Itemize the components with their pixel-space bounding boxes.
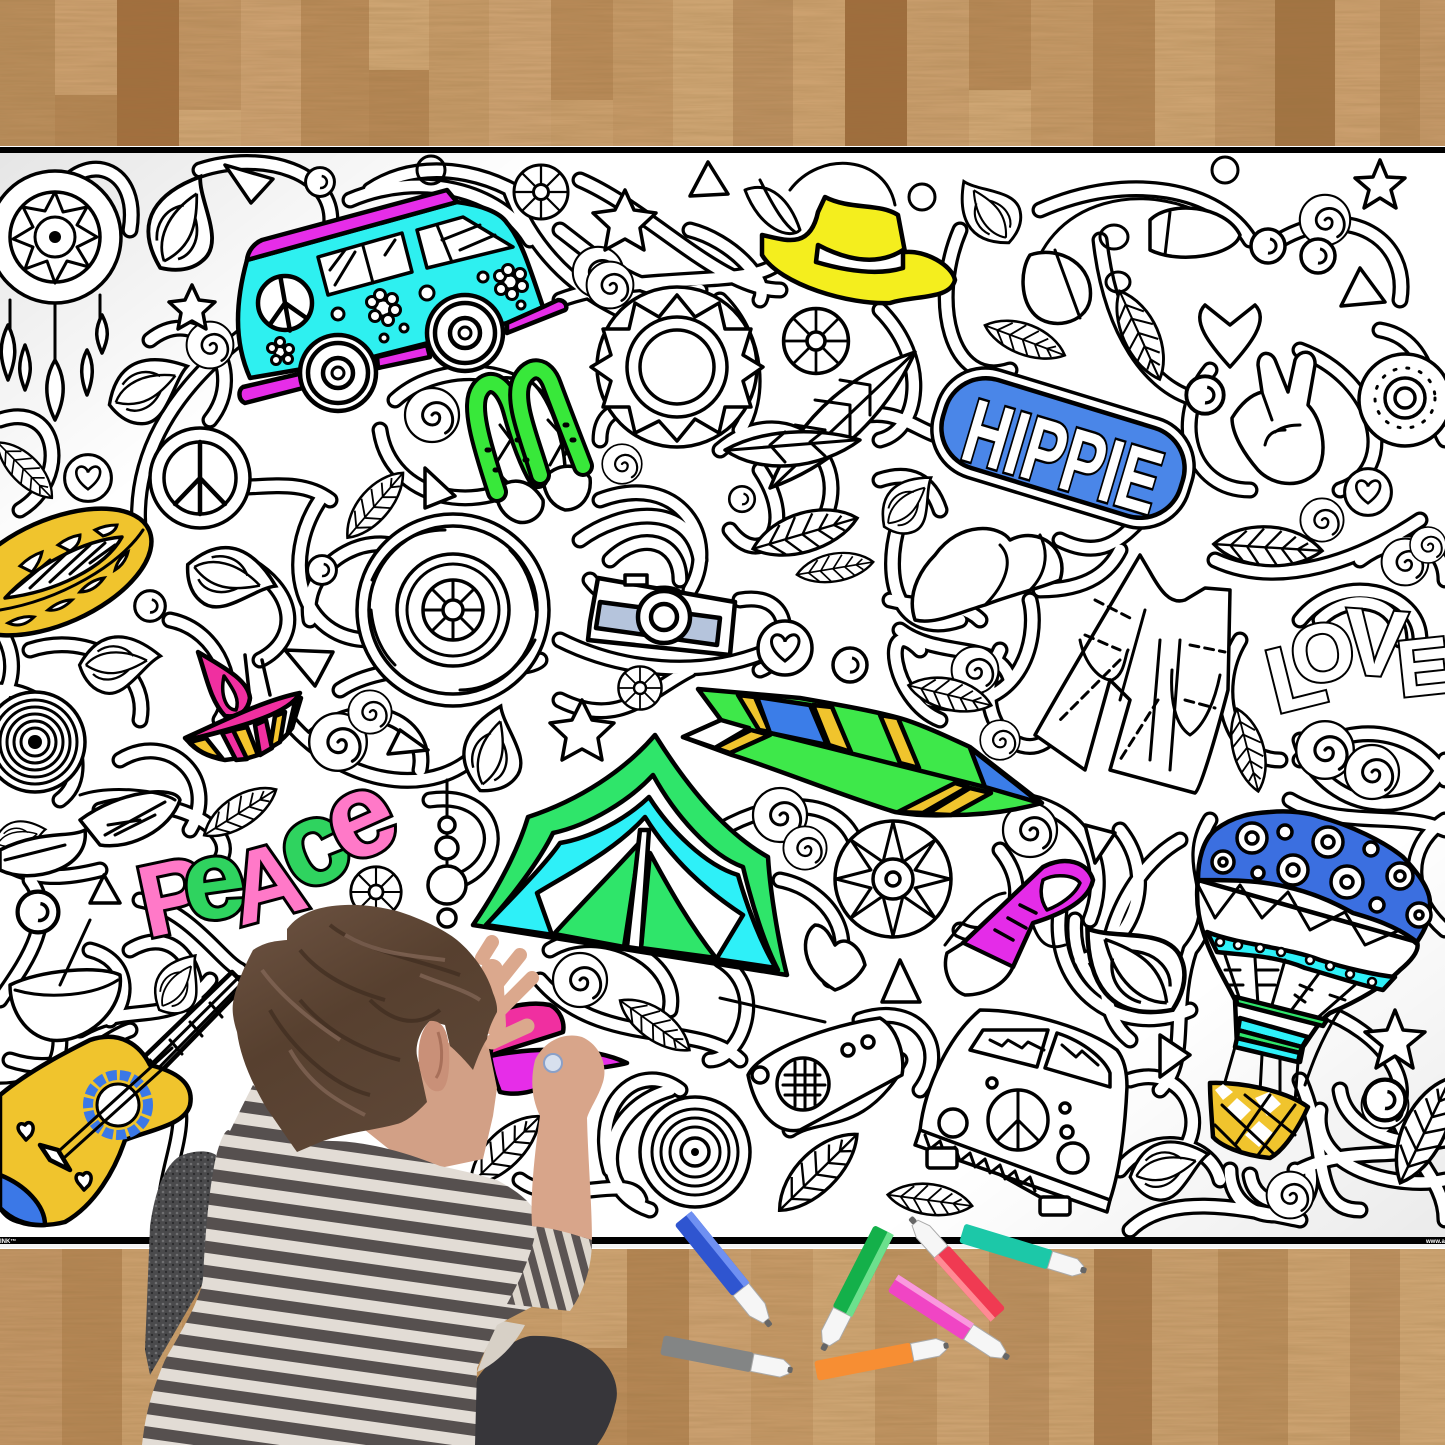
line-art ribbons — [0, 162, 1445, 1230]
star centre — [550, 700, 614, 760]
neck and face — [365, 1030, 497, 1168]
letter c: c — [255, 770, 369, 918]
torso shirt — [142, 1085, 545, 1445]
pink hat behind boy — [490, 1004, 627, 1094]
pink sneaker — [945, 861, 1093, 995]
tent — [473, 735, 787, 975]
letter V: V — [1341, 588, 1411, 697]
marker: blue — [674, 1211, 779, 1333]
marker: magenta — [888, 1275, 1014, 1367]
raised hand fingers — [482, 942, 532, 1042]
letter L: L — [1256, 621, 1335, 733]
radio — [720, 998, 903, 1131]
yellow hat — [745, 163, 955, 303]
marker: orange — [814, 1335, 950, 1381]
sun mandala — [591, 287, 763, 447]
colored van top left — [238, 190, 566, 411]
star wheel — [835, 821, 951, 937]
boy — [142, 905, 617, 1445]
star lower right — [1365, 1010, 1425, 1068]
ear — [418, 1021, 449, 1091]
chain beads — [428, 780, 466, 927]
headphones — [1023, 199, 1240, 323]
right shoe strap — [519, 369, 583, 475]
star left — [169, 285, 215, 329]
letter e: e — [174, 813, 253, 946]
white van bottom — [915, 1010, 1127, 1215]
green shoes — [476, 369, 590, 523]
loose circles — [417, 156, 1238, 292]
marker in hand — [544, 1054, 562, 1072]
feather — [725, 352, 915, 488]
footer brand text: INK™ — [0, 1238, 16, 1245]
letter P: P — [128, 834, 218, 960]
triangles — [90, 162, 1385, 1077]
star top right — [1355, 160, 1405, 208]
peace sign — [150, 428, 250, 528]
letter A: A — [216, 818, 317, 947]
white tummy — [477, 1320, 525, 1372]
cup — [10, 920, 120, 1040]
vinyl record — [357, 514, 549, 706]
camera — [588, 575, 735, 655]
poster sheet — [0, 146, 1445, 1249]
flower mandala right — [1359, 354, 1445, 446]
letter e2: e — [302, 742, 416, 890]
love lettering — [1256, 588, 1445, 733]
vinyl disc bottom — [640, 1097, 750, 1207]
lamp — [185, 652, 301, 760]
marker: green — [813, 1225, 894, 1355]
dreamcatcher — [0, 171, 121, 420]
heart — [805, 925, 865, 990]
letter O: O — [1283, 603, 1362, 704]
peace lettering — [128, 742, 416, 960]
left shoe strap — [476, 383, 538, 492]
shirt sleeve — [507, 1216, 592, 1311]
writing arm — [532, 1036, 604, 1240]
sunglasses — [0, 790, 180, 876]
vinyl disc left — [0, 692, 85, 792]
marker: teal — [959, 1223, 1089, 1281]
marker: gray — [660, 1335, 794, 1380]
guitar — [0, 972, 245, 1225]
footer website text: www.a — [1425, 1239, 1445, 1245]
left knee — [145, 1151, 216, 1375]
star on ribbon top — [593, 190, 656, 250]
jeans leg — [470, 1336, 617, 1445]
denim jacket — [1035, 555, 1230, 793]
hippie badge — [919, 356, 1207, 540]
tambourine — [0, 483, 170, 661]
cloud — [912, 529, 1062, 621]
hot air balloon — [1197, 811, 1431, 1158]
marker: red — [903, 1211, 1005, 1322]
van windows — [318, 217, 513, 295]
peace hand — [1200, 305, 1323, 484]
small doodle motifs — [0, 156, 1445, 1223]
hippie text: HIPPIE — [952, 381, 1172, 534]
feather surfboard — [683, 689, 1042, 815]
hair — [233, 905, 497, 1152]
